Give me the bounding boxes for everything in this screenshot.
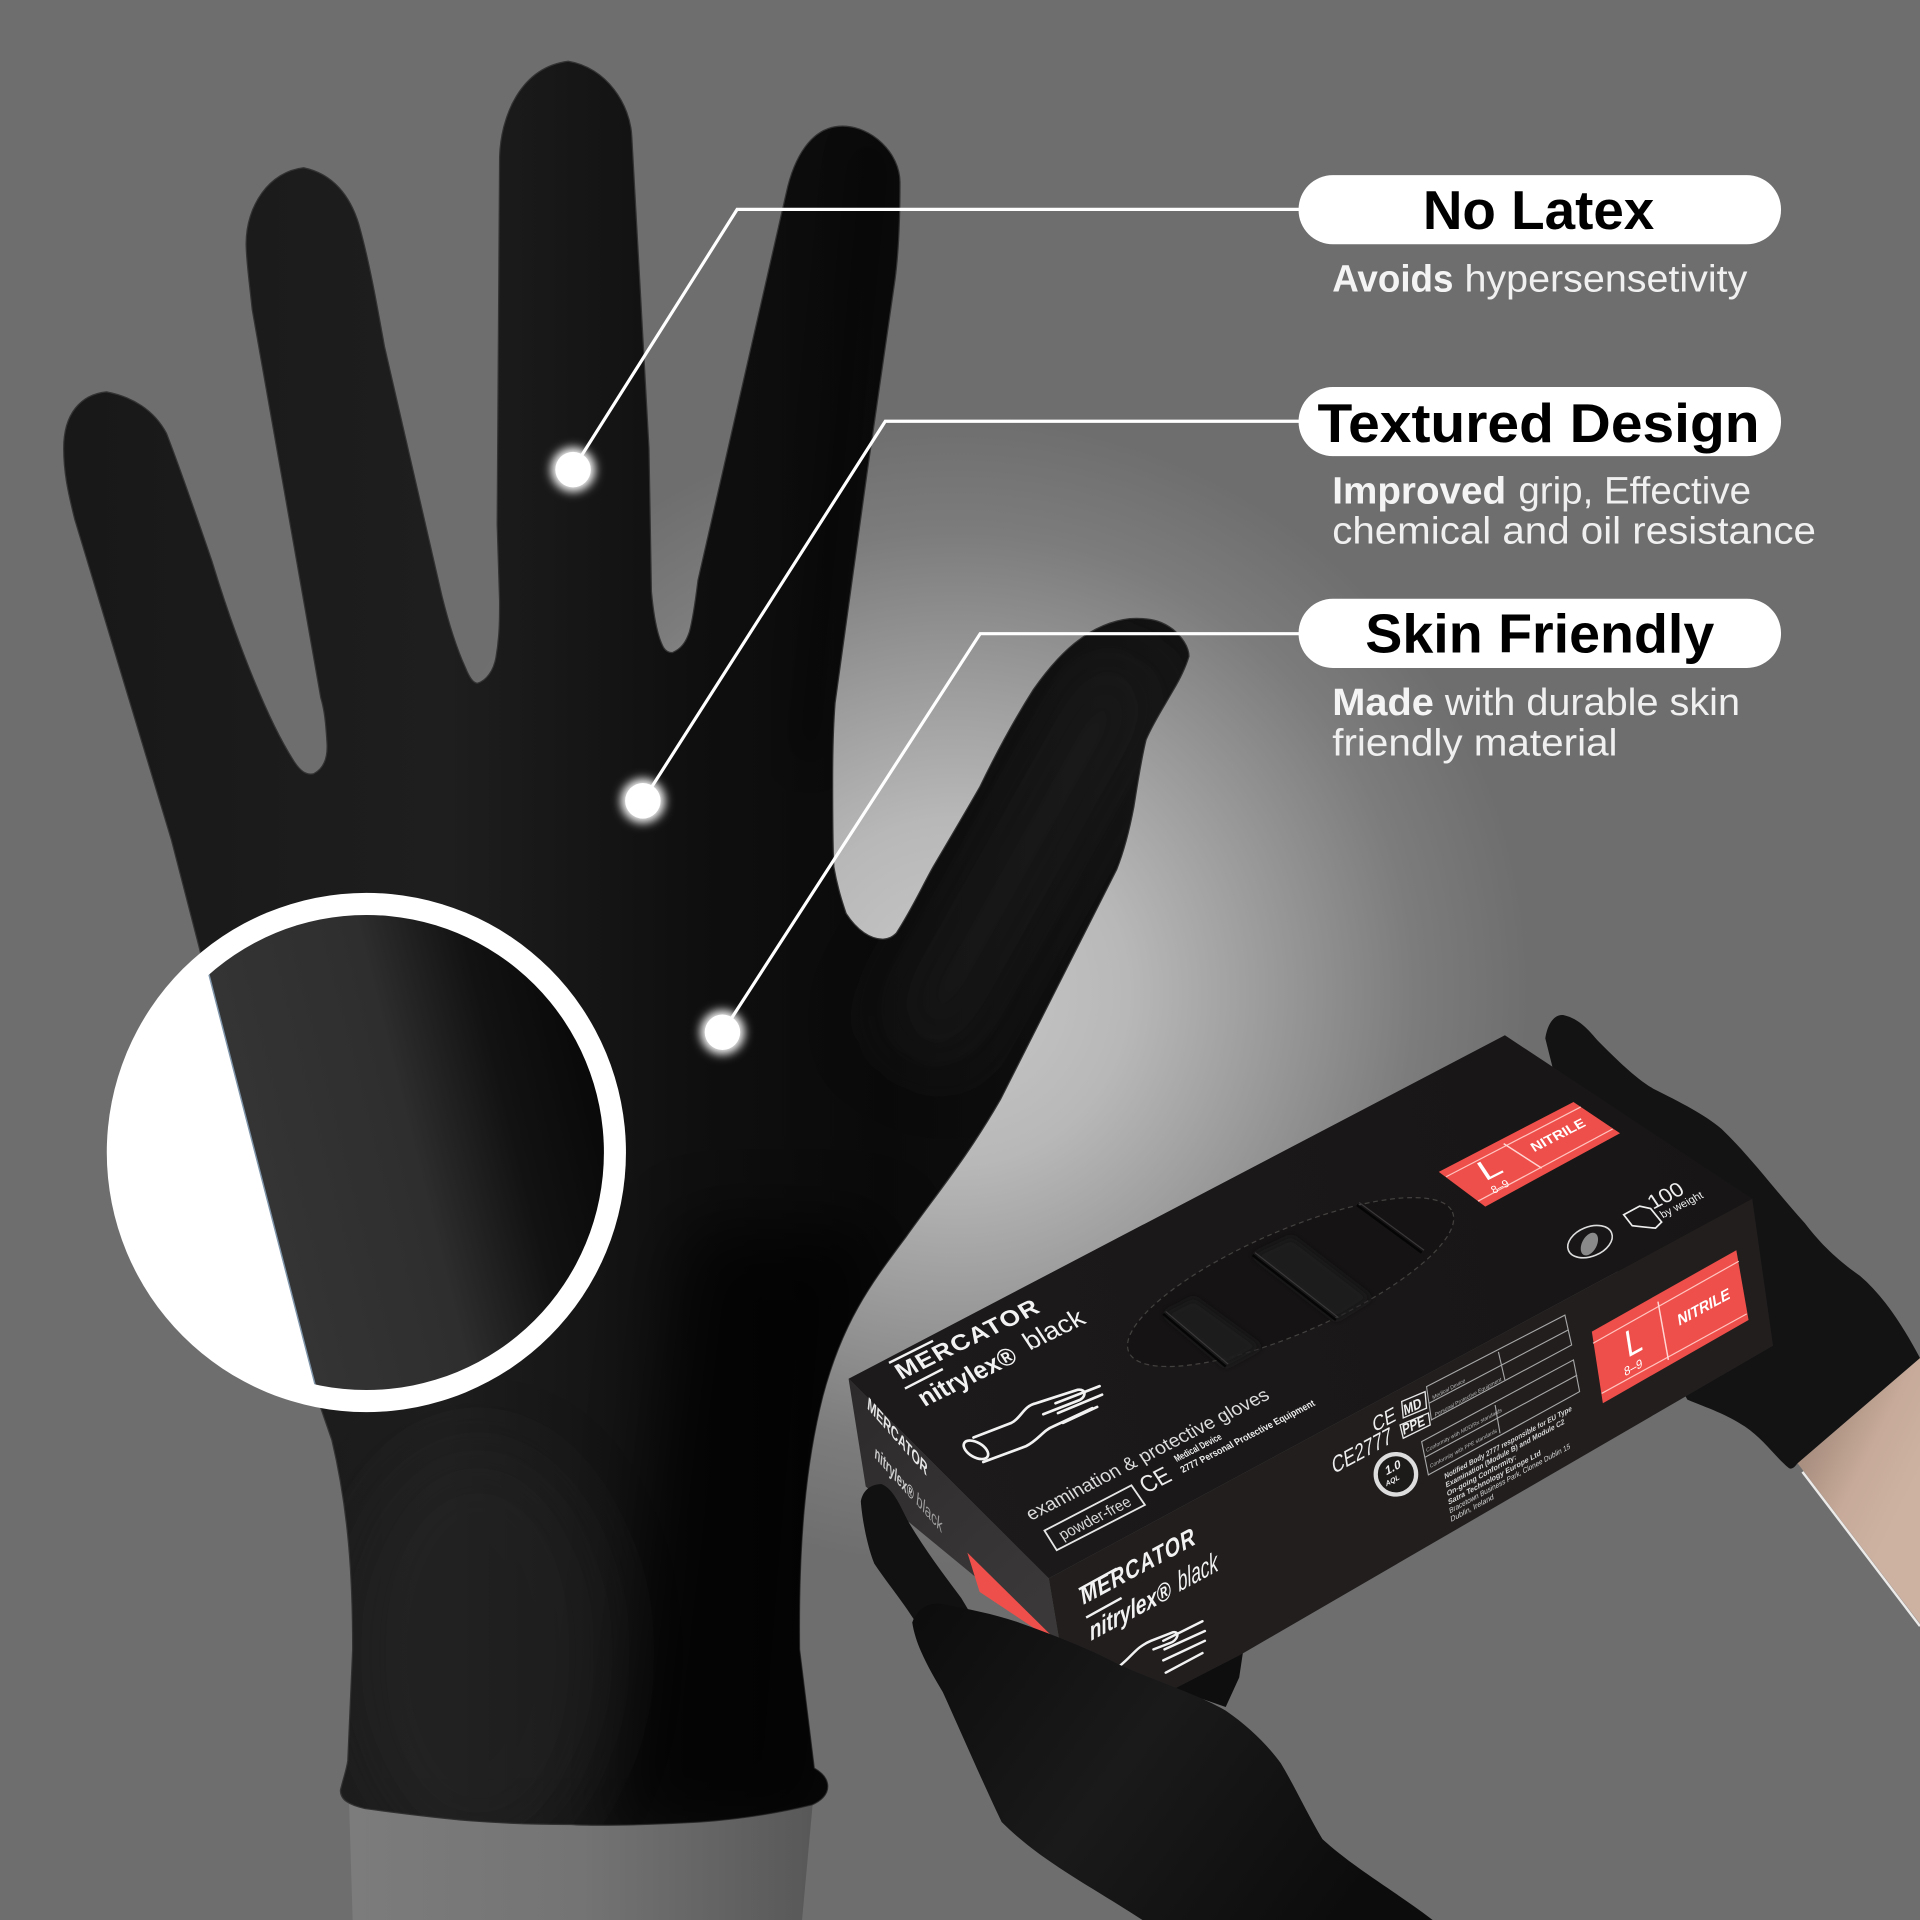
- main black glove: [64, 61, 1189, 1861]
- CE mark and medical device text: 2777 Personal Protective Equipment: [1178, 1398, 1318, 1476]
- feature: Textured Design: [1299, 387, 1816, 553]
- regulatory table: Conformity with PPE standards: [1430, 1428, 1498, 1470]
- top face glove icon: [961, 1386, 1102, 1463]
- front CE marks: PPE: [1401, 1413, 1426, 1439]
- top red size label: [1439, 1102, 1620, 1207]
- notified body text: Notified Body 2777 responsible for EU Type: [1444, 1404, 1572, 1481]
- feature: Textured Design: Improved: [1332, 470, 1506, 512]
- marker dot 1: [551, 448, 595, 492]
- notified body text: On-going Conformity:: [1446, 1452, 1517, 1498]
- feature: Skin Friendly: with durable skin: [1444, 682, 1740, 724]
- top face product text: examination & protective gloves: [1022, 1385, 1274, 1525]
- regulatory table: [1422, 1315, 1580, 1475]
- front face logo: [1079, 1522, 1221, 1647]
- regulatory table: Medical Device: [1432, 1378, 1466, 1402]
- top red size label: NITRILE: [1528, 1115, 1588, 1155]
- bare forearm at right: [1798, 1358, 1920, 1626]
- top red size label: L: [1471, 1150, 1509, 1187]
- front red size label: 8–9: [1623, 1356, 1643, 1379]
- feature: Textured Design: chemical and oil resistance: [1332, 511, 1816, 553]
- notified body text: [1444, 1404, 1572, 1524]
- end face branding: MERCATOR: [867, 1392, 929, 1481]
- regulatory table: Conformity with MDD/Rx standards: [1426, 1407, 1503, 1454]
- front red size label: NITRILE: [1677, 1285, 1731, 1330]
- notified body text: Bracetown Business Park, Clonee Dublin 15: [1449, 1441, 1571, 1515]
- front CE marks: CE: [1371, 1403, 1397, 1438]
- dispenser window: [1108, 1165, 1473, 1399]
- front face logo: nitrylex®: [1088, 1575, 1173, 1647]
- right gloved hand behind box: [1545, 1015, 1920, 1469]
- CE mark and medical device text: [1135, 1398, 1318, 1499]
- magnified glove texture circle: [107, 882, 637, 1420]
- front face logo: black: [1175, 1545, 1221, 1598]
- front CE marks: [1330, 1392, 1430, 1479]
- callout line: Textured Design: [643, 421, 1300, 801]
- box front face: [1049, 1199, 1773, 1739]
- notified body text: Satra Technology Europe Ltd: [1447, 1448, 1542, 1507]
- top face logo: nitrylex®: [912, 1342, 1023, 1412]
- feature: Skin Friendly: [1299, 599, 1781, 765]
- feature: Skin Friendly: Made: [1332, 682, 1434, 724]
- callout line: Skin Friendly: [722, 634, 1300, 1032]
- lower glove finger behind box: [1176, 1653, 1243, 1707]
- feature: No Latex: Avoids: [1332, 258, 1453, 300]
- front face logo: MERCATOR: [1079, 1522, 1198, 1611]
- AQL seal: [1376, 1454, 1416, 1494]
- end face red label: [967, 1553, 1051, 1635]
- front red size label: [1592, 1250, 1749, 1403]
- feature: Textured Design: grip, Effective: [1518, 470, 1751, 512]
- pack quantity: 100: [1643, 1178, 1689, 1214]
- front CE marks: MD: [1403, 1395, 1423, 1419]
- box end face: [849, 1379, 1060, 1647]
- forearm below main glove: [349, 1800, 813, 1920]
- feature: Skin Friendly: Skin Friendly: [1365, 603, 1715, 665]
- AQL seal: AQL: [1385, 1472, 1401, 1489]
- notified body text: Dublin, Ireland: [1450, 1492, 1494, 1524]
- feature: Textured Design: Textured Design: [1318, 392, 1760, 454]
- top red size label: 8–9: [1489, 1178, 1512, 1196]
- end face branding: [867, 1392, 944, 1537]
- powder-free badge: [1044, 1485, 1145, 1550]
- feature: Skin Friendly: friendly material: [1332, 723, 1618, 765]
- feature: No Latex: hypersensetivity: [1464, 258, 1747, 300]
- marker dot 2: [621, 779, 665, 823]
- texture badge icon: [1563, 1219, 1617, 1264]
- pack quantity: by weight: [1658, 1190, 1706, 1221]
- CE mark and medical device text: CE: [1135, 1462, 1177, 1499]
- end face branding: nitrylex®: [874, 1441, 915, 1505]
- front red size label: L: [1622, 1317, 1645, 1366]
- regulatory table: Personal Protective Equipment: [1434, 1377, 1502, 1419]
- CE mark and medical device text: Medical Device: [1172, 1432, 1225, 1465]
- end face branding: black: [916, 1488, 944, 1537]
- front CE marks: CE2777: [1330, 1422, 1394, 1479]
- top face logo: black: [1018, 1304, 1091, 1356]
- pack quantity: [1624, 1178, 1706, 1228]
- front face glove icon: [1120, 1621, 1205, 1673]
- powder-free badge: powder-free: [1056, 1494, 1135, 1544]
- top face logo: MERCATOR: [890, 1294, 1045, 1384]
- feature: No Latex: [1299, 175, 1781, 300]
- glove box: [849, 1035, 1773, 1739]
- marker dot 3: [700, 1010, 744, 1054]
- AQL seal: 1.0: [1384, 1456, 1402, 1478]
- feature: No Latex: No Latex: [1423, 179, 1655, 241]
- box top face: [849, 1035, 1752, 1578]
- callout line: No Latex: [573, 209, 1300, 469]
- notified body text: Examination (Module B) and Module C2: [1445, 1417, 1565, 1490]
- left gloved hand holding box: [861, 1484, 1433, 1920]
- top face logo: [889, 1294, 1091, 1412]
